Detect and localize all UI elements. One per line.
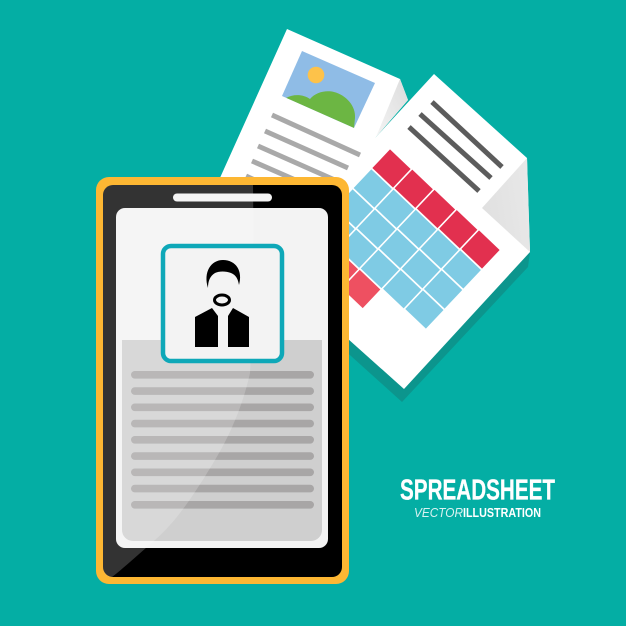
smartphone [96, 177, 349, 584]
speaker [173, 194, 272, 202]
page sheet [165, 29, 408, 300]
page sheet [290, 74, 530, 389]
document page with photo [220, 29, 408, 186]
subtitle: ILLUSTRATION [463, 505, 541, 520]
screen [116, 208, 328, 548]
screen gloss [103, 185, 253, 577]
spreadsheet page [290, 74, 530, 389]
heading lines [409, 102, 502, 191]
table blue cells [317, 170, 480, 328]
page fold [482, 158, 530, 252]
phone black body [103, 185, 342, 577]
photo thumbnail [282, 51, 375, 128]
icon: man in suit [195, 260, 249, 347]
illustration canvas [96, 29, 555, 584]
subtitle [414, 505, 541, 520]
text lines [246, 115, 360, 187]
title text: SPREADSHEET [400, 474, 555, 506]
phone yellow frame [96, 177, 349, 584]
profile card [163, 246, 282, 361]
table header red row [373, 150, 499, 268]
spreadsheet page shadow [300, 252, 530, 402]
table faded red cells [320, 250, 380, 308]
content text lines [131, 371, 314, 509]
content panel [122, 340, 322, 541]
page fold [376, 79, 408, 137]
subtitle: VECTOR [414, 505, 463, 520]
title text [400, 474, 555, 520]
